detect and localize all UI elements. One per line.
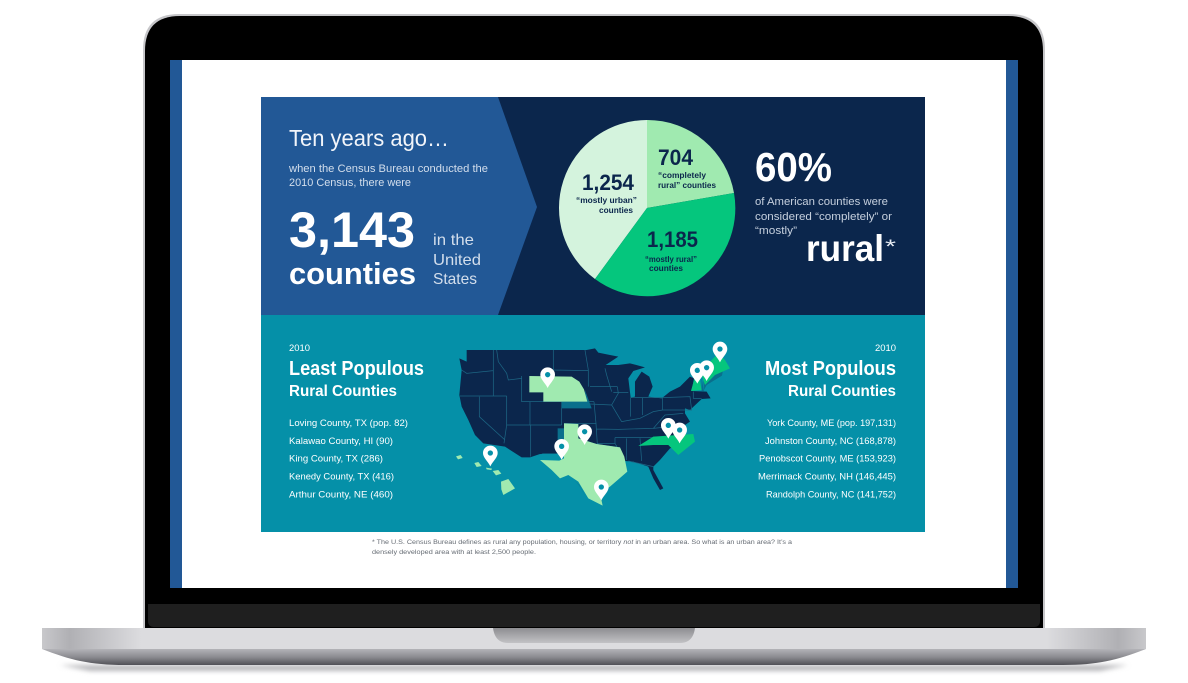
most populous list: York County, ME (pop. 197,131)	[767, 418, 896, 429]
label: 704: “completely	[658, 171, 707, 180]
pin: King County TX	[577, 424, 592, 445]
state: Texas	[540, 423, 627, 506]
most populous list	[758, 343, 896, 500]
label: 1,254: “mostly urban”	[576, 196, 637, 205]
navy background	[261, 97, 925, 315]
least populous list	[289, 343, 424, 500]
page background	[182, 60, 1006, 588]
60 percent: 60%	[755, 144, 832, 190]
pin: Maine south	[699, 360, 714, 381]
least populous list: Rural Counties	[289, 383, 397, 400]
heading: ten years ago: Ten years ago…	[289, 125, 449, 151]
screen	[170, 60, 1018, 588]
intro text: 2010 Census, there were	[289, 177, 411, 189]
shadow: highlighted states	[537, 368, 723, 497]
pin: Kenedy County TX	[594, 480, 609, 500]
label: 1,254: 1,254	[582, 170, 635, 195]
label: 704: rural” counties	[658, 181, 717, 190]
lower bezel	[148, 604, 1040, 627]
panel: county totals	[261, 97, 925, 315]
label: 1,185: “mostly rural”	[645, 255, 697, 264]
rural word: rural	[806, 228, 884, 269]
in the United States: States	[433, 271, 477, 288]
laptop front lip	[42, 649, 1146, 665]
slice: completely rural	[647, 120, 734, 208]
callout: 60 percent rural	[755, 144, 897, 269]
label: 1,185: 1,185	[647, 227, 698, 252]
most populous list: Penobscot County, ME (153,923)	[759, 454, 896, 464]
callout description: considered “completely” or	[755, 211, 892, 223]
asterisk: *	[885, 237, 897, 258]
most populous list: Most Populous	[765, 358, 896, 380]
most populous list: Randolph County, NC (141,752)	[766, 490, 896, 500]
least populous list: King County, TX (286)	[289, 454, 383, 464]
least populous list: Kenedy County, TX (416)	[289, 472, 394, 482]
right blue sidebar	[1006, 60, 1018, 588]
panel: populous counties	[261, 315, 925, 532]
map of the United States	[456, 342, 730, 506]
least populous list: Arthur County, NE (460)	[289, 490, 393, 500]
callout description	[755, 196, 892, 237]
in the United States: United	[433, 252, 481, 269]
location pins	[483, 342, 727, 500]
intro text: when the Census Bureau conducted the	[288, 163, 488, 175]
laptop bezel	[145, 16, 1043, 628]
least populous list: Kalawao County, HI (90)	[289, 436, 393, 447]
left blue sidebar	[170, 60, 182, 588]
most populous list: Rural Counties	[788, 383, 896, 400]
laptop lid	[143, 14, 1045, 628]
label: 1,254	[576, 170, 637, 215]
most populous list: Johnston County, NC (168,878)	[765, 436, 896, 447]
counties word: counties	[289, 256, 416, 291]
pie chart	[559, 120, 735, 296]
callout description: of American counties were	[755, 196, 888, 208]
intro text	[288, 163, 488, 189]
state: Maine	[702, 353, 730, 385]
pin: New Hampshire	[690, 363, 705, 384]
pin: Nebraska	[540, 367, 555, 388]
teal background	[261, 315, 925, 532]
label: 704	[658, 145, 717, 190]
state: Hawaii	[456, 455, 515, 495]
label: 704: 704	[658, 145, 694, 170]
footnote	[372, 539, 792, 556]
in the United States: in the	[433, 232, 474, 249]
least populous list: Loving County, TX (pop. 82)	[289, 418, 408, 429]
pin: Randolph NC	[672, 423, 687, 443]
laptop shadow	[60, 665, 1128, 671]
pin: Johnston NC	[661, 418, 676, 439]
in the United States	[433, 232, 481, 288]
label: 1,254: counties	[599, 206, 634, 215]
slice: mostly urban	[559, 120, 647, 279]
blue arrow panel	[261, 97, 537, 315]
contiguous states	[459, 348, 711, 490]
most populous list: Merrimack County, NH (146,445)	[758, 472, 896, 482]
state borders	[460, 350, 702, 467]
footnote: * The U.S. Census Bureau defines as rural any population, housing, or territory not in an urban area. So what is an urban area? It’s a	[372, 539, 792, 546]
label: 1,185: counties	[649, 264, 684, 273]
callout description: “mostly”	[755, 225, 797, 237]
label: 1,185	[645, 227, 698, 273]
pin: Loving County TX	[554, 439, 569, 460]
pin: Hawaii	[483, 446, 498, 466]
most populous list: 2010	[875, 343, 896, 353]
big number 3,143: 3,143	[289, 202, 415, 258]
least populous list: 2010	[289, 343, 310, 353]
least populous list: Least Populous	[289, 358, 424, 380]
laptop deck	[42, 628, 1146, 649]
state: Nebraska	[529, 376, 587, 402]
slice: mostly rural	[595, 193, 735, 296]
state: North Carolina	[638, 434, 695, 455]
trackpad notch	[493, 628, 695, 643]
footnote: densely developed area with at least 2,500 people.	[372, 549, 536, 556]
state: New Hampshire	[691, 367, 702, 391]
pin: Maine north	[713, 342, 727, 362]
